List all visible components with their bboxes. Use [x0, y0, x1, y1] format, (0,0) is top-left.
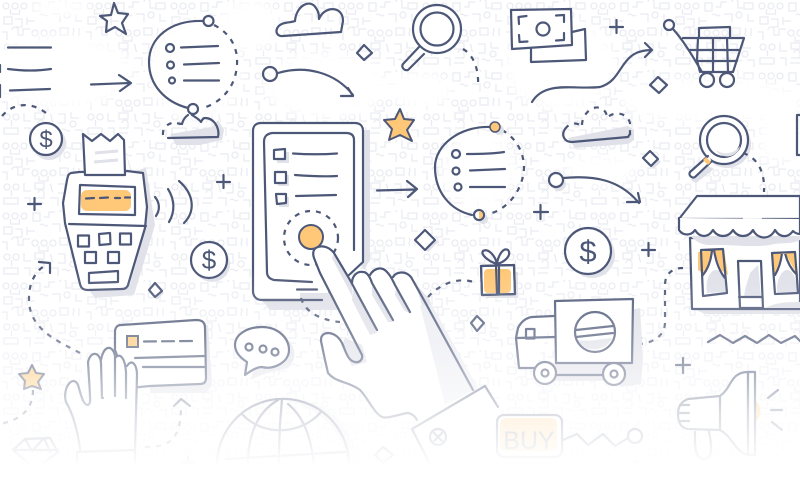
icon: right edge panel: [797, 115, 800, 155]
checklist on tablet: [274, 149, 337, 207]
icon: star orange: [384, 109, 414, 141]
icon: small diamond left: [149, 283, 164, 300]
icon: diamond top: [357, 45, 372, 60]
arrow: dashed below tablet: [301, 298, 340, 322]
top-left list lines: [0, 48, 51, 116]
arrow: dashed up: [145, 399, 190, 447]
icon: cloud under list: [163, 115, 224, 145]
icon: small peak: [630, 461, 644, 467]
icon: list circle two: [435, 122, 524, 224]
truck wheels: [534, 362, 625, 385]
icon: star outline: [100, 3, 128, 34]
icon: diamond under gift: [471, 316, 484, 331]
icon: buy button: BUY: [503, 427, 555, 455]
tablet button: [284, 211, 338, 265]
icon: dollar coin right: [565, 228, 615, 278]
icon: banknotes: [511, 9, 586, 62]
icon: dollar coin left: [30, 123, 66, 160]
store awning: [679, 196, 800, 246]
icon: globe: [217, 399, 361, 490]
icon: magnifier right: [689, 116, 764, 192]
icon: delivery truck: [516, 299, 643, 387]
icon: cloud top: [276, 4, 343, 36]
arrow: dashed loop up to terminal: [29, 262, 80, 353]
icon: list circle one: [149, 16, 237, 114]
icon: diamond bottom: [375, 447, 393, 463]
icon: raised left hand: [65, 348, 137, 490]
icon: diamond mid right: [643, 151, 661, 169]
icon: diamond center: [415, 230, 438, 252]
icon: storefront: [679, 196, 800, 314]
store window right: [772, 252, 798, 294]
arrow: curved right: [549, 173, 640, 203]
icon: cloud right: [563, 107, 634, 148]
icon: gem: [13, 438, 58, 469]
icon: gift box: [481, 249, 518, 298]
icon: magnifier top: [402, 5, 478, 87]
big pointing hand: [313, 246, 510, 490]
icon: line to circle: [563, 429, 642, 446]
icon: star orange lower: [19, 365, 44, 389]
arrow: top left: [91, 75, 131, 91]
icon: zigzag line: [708, 335, 800, 343]
icon: dollar coin middle: $: [202, 245, 217, 275]
arrow: tablet to list: [377, 181, 417, 197]
arrow: dashed to gift: [428, 280, 477, 297]
bottom fade: [0, 270, 800, 467]
icon: megaphone: [678, 372, 782, 459]
icon: dollar coin left: $: [39, 126, 53, 154]
icon: dollar coin right: $: [579, 234, 597, 269]
arrow: curved top: [263, 67, 353, 96]
store window left: [698, 249, 728, 296]
icon: dollar coin middle: [191, 242, 230, 282]
shirt cuff: [412, 386, 498, 470]
store door: [738, 261, 763, 308]
icon: contactless waves: [155, 181, 192, 223]
icon: diamond cart: [650, 77, 667, 93]
panel: tablet: [253, 123, 370, 310]
icon: buy button: [497, 415, 562, 457]
icon: shopping cart: [664, 20, 744, 87]
icon: plus signs: [28, 20, 690, 469]
icon: speech bubble: [235, 327, 294, 380]
icon: credit card: [115, 320, 212, 393]
icon: payment terminal: [63, 134, 155, 298]
arrow: dashed store to truck: [635, 268, 683, 350]
arrow: wave to cart: [532, 43, 652, 102]
arrow: dashed from lower star: [0, 390, 33, 424]
